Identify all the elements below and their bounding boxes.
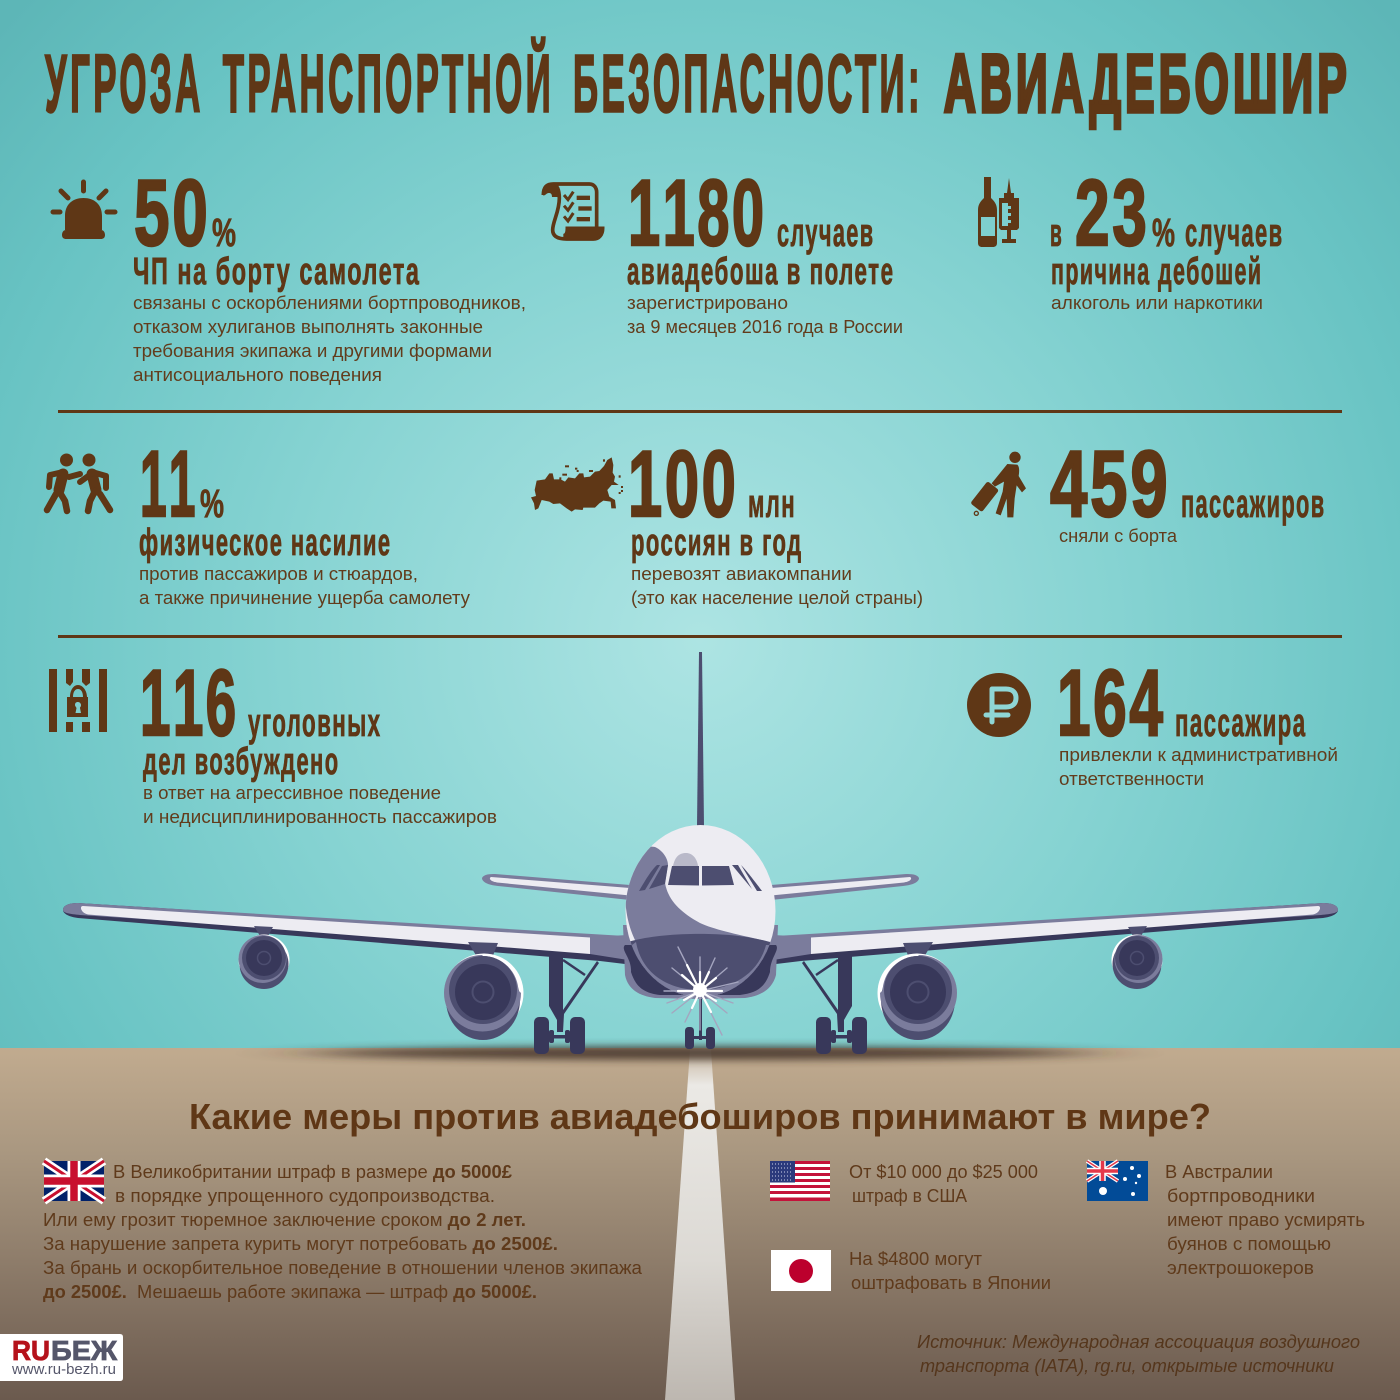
heading: world measures: Какие меры против авиадебоширов принимают в мире? (189, 1096, 1211, 1137)
unit: уголовных (248, 701, 382, 745)
background sky (0, 0, 1400, 1050)
text: UK fines (43, 1161, 643, 1302)
description: привлекли к административной (1059, 744, 1338, 765)
icon: ruble coin (967, 673, 1031, 737)
text: Japan fine (849, 1248, 1051, 1293)
icon: passenger with suitcase (970, 452, 1026, 517)
logo: www.ru-bezh.ru (11, 1361, 116, 1378)
description: ответственности (1059, 768, 1204, 789)
cockpit windows (639, 865, 762, 891)
panel: 100 million (531, 431, 923, 608)
number: 459 (1050, 431, 1170, 536)
flag: Australia (1087, 1161, 1148, 1201)
number: 100 (628, 431, 738, 536)
number: 11 (140, 431, 198, 536)
icon: map of Russia (531, 457, 623, 512)
description: алкоголь или наркотики (1051, 292, 1263, 313)
description (631, 563, 923, 608)
text: USA fine: От $10 000 до $25 000 (849, 1161, 1038, 1182)
subheading: авиадебоша в полете (627, 251, 894, 293)
panel: Great Britain (43, 1161, 643, 1302)
main gear (549, 955, 599, 1032)
number: 164 (1057, 650, 1166, 755)
plane shadow (310, 1046, 1090, 1060)
airplane illustration (63, 652, 1338, 1054)
text: UK fines: В Великобритании штраф в размере до 5000£ (113, 1161, 513, 1182)
icon: bottle and syringe (978, 177, 1019, 247)
logo: БЕЖ (51, 1335, 118, 1366)
description: требования экипажа и другими формами (133, 340, 492, 361)
text: Australia measure: электрошокеров (1167, 1257, 1314, 1278)
percent and unit: случаев (1185, 211, 1284, 255)
description (139, 563, 471, 608)
panel: USA (770, 1161, 1038, 1206)
source note: транспорта (IATA), rg.ru, открытые источники (920, 1355, 1334, 1376)
text: USA fine (849, 1161, 1038, 1206)
panel: 11 percent (47, 431, 471, 608)
unit: млн (748, 482, 796, 526)
description: (это как население целой страны) (631, 587, 923, 608)
icon: alarm light (53, 182, 115, 239)
source note: Источник: Международная ассоциация воздушного (917, 1331, 1360, 1352)
text: Australia measure: В Австралии (1165, 1161, 1273, 1182)
number: 116 (140, 650, 238, 755)
text: Japan fine: оштрафовать в Японии (851, 1272, 1051, 1293)
panel: 164 passengers (967, 650, 1338, 789)
text: Australia measure: буянов с помощью (1167, 1233, 1331, 1254)
fuselage (625, 825, 776, 1000)
cockpit dome (673, 853, 698, 866)
panel: 23 percent: в (1050, 211, 1063, 255)
text: UK fines: За брань и оскорбительное поведение в отношении членов экипажа (43, 1257, 643, 1278)
description: и недисциплинированность пассажиров (143, 806, 497, 827)
small engine (254, 926, 273, 936)
logo (0, 1334, 123, 1381)
runway strip (665, 1050, 735, 1400)
flag: USA (770, 1161, 830, 1201)
belly fairing (623, 925, 778, 999)
right half of aircraft (mirror) (771, 874, 1338, 1054)
text: UK fines: Или ему грозит тюремное заключение сроком до 2 лет. (43, 1209, 526, 1230)
text: USA fine: штраф в США (852, 1185, 968, 1206)
tail fin (697, 652, 704, 826)
nose light flare (664, 947, 738, 1035)
description (143, 782, 497, 827)
description (133, 292, 526, 385)
text: UK fines: в порядке упрощенного судопроизводства. (115, 1185, 495, 1206)
big engine (468, 942, 498, 958)
description: в ответ на агрессивное поведение (143, 782, 441, 803)
unit: случаев (777, 211, 874, 255)
description (1059, 744, 1338, 789)
text: Australia measure: бортпроводники (1167, 1185, 1315, 1206)
description: за 9 месяцев 2016 года в России (627, 316, 903, 337)
number: 50 (134, 160, 210, 265)
panel: 1180 cases (543, 160, 903, 337)
panel: 116 criminal cases (49, 650, 497, 827)
source note (917, 1331, 1360, 1376)
description: перевозят авиакомпании (631, 563, 852, 584)
nose gear (685, 990, 715, 1049)
left half of aircraft: wings, engines, gear (63, 874, 630, 1054)
description: а также причинение ущерба самолету (139, 587, 471, 608)
panel: 23 percent (978, 160, 1284, 313)
icon: fighting people (47, 454, 110, 511)
percent sign: % (212, 211, 236, 255)
description: отказом хулиганов выполнять законные (133, 316, 483, 337)
ground (0, 1048, 1400, 1400)
panel: Australia (1087, 1161, 1365, 1278)
flag: UK (44, 1161, 104, 1201)
text: Australia measure (1165, 1161, 1365, 1278)
icon: checklist scroll (543, 184, 603, 239)
text: Japan fine: На $4800 могут (849, 1248, 983, 1269)
percent and unit: % (1152, 211, 1175, 255)
panel: 50 percent (53, 160, 526, 385)
description: антисоциального поведения (133, 364, 382, 385)
percent sign: % (200, 482, 224, 526)
text: UK fines: За нарушение запрета курить могут потребовать до 2500£. (43, 1233, 558, 1254)
text: UK fines: до 2500£. Мешаешь работе экипажа — штраф до 5000£. (43, 1281, 537, 1302)
number: 23 (1075, 160, 1150, 265)
panel: Japan (771, 1248, 1051, 1293)
description: зарегистрировано (627, 292, 788, 313)
subheading: россиян в год (631, 522, 802, 564)
number: 1180 (628, 160, 766, 265)
panel: 459 passengers (970, 431, 1326, 546)
text: Australia measure: имеют право усмирять (1167, 1209, 1365, 1230)
percent and unit (1152, 211, 1284, 255)
description: сняли с борта (1059, 525, 1178, 546)
flag: Japan (771, 1250, 831, 1291)
subheading: дел возбуждено (143, 741, 340, 783)
logo: RU (12, 1335, 50, 1366)
subheading: ЧП на борту самолета (133, 251, 420, 293)
subheading: физическое насилие (139, 522, 392, 564)
description: связаны с оскорблениями бортпроводников, (133, 292, 526, 313)
description (627, 292, 903, 337)
icon: prison bars with lock (49, 669, 107, 732)
description: против пассажиров и стюардов, (139, 563, 418, 584)
